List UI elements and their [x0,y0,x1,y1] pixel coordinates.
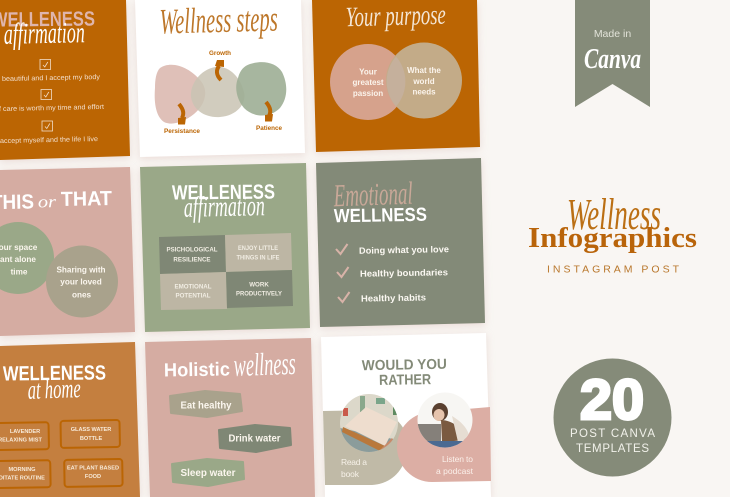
badge text: POST CANVA [570,428,655,440]
heading: this or that [0,187,113,214]
heading: holistic: Holistic [164,359,230,382]
script: at home: at home [27,373,81,405]
item text: FOOD [85,474,101,480]
list text: Healthy habits [361,292,426,304]
venn text: world [412,77,435,86]
grid of four quadrants: WORK [249,282,269,288]
item text [0,427,119,482]
grid of four quadrants: RESILIENCE [173,256,211,264]
option text: read a book: Read a [341,457,367,467]
grid of four quadrants: THINGS IN LIFE [236,254,280,262]
grid of four quadrants [159,233,293,310]
option text: Sharing with [56,266,106,274]
subtitle: instagram post: INSTAGRAM POST [547,264,680,276]
script: wellness: wellness [233,345,296,383]
shape: pink option [397,407,491,482]
heading: this or that: THAT [61,187,113,211]
venn text: passion [353,89,383,98]
badge: eat healthy [170,391,242,417]
item text: EAT PLANT BASED [67,466,119,472]
option text [0,243,106,300]
script: affirmation: affirmation [183,190,265,224]
photo: woman with headphones [417,392,475,449]
venn text: Your [359,68,377,76]
grid of four quadrants: PSICHOLOGICAL [166,246,218,254]
ribbon: made in canva [575,0,650,107]
shape: taupe option [323,410,408,485]
venn text [352,66,441,98]
arrow: patience [265,102,273,122]
script: affirmation: affirmation [3,16,85,51]
number: 20: 20 [580,368,644,432]
step labels: Growth [209,51,231,57]
item text: GLASS WATER [71,427,111,433]
option text: ant alone [0,255,36,264]
check icons [336,244,350,302]
option text: ones [72,290,91,300]
panel: this or that [0,167,135,336]
panel: welleness at home [0,342,140,497]
blob: beige [191,67,244,117]
heading: welleness: WELLENESS [172,181,275,204]
option text: time [11,268,28,276]
step labels: Patience [256,126,283,132]
badge: drink water [219,425,291,452]
grid of four quadrants: PRODUCTIVELY [236,290,283,298]
list text: Healthy boundaries [360,267,448,279]
ribbon text: made in: Made in [594,28,631,40]
heading: would you rather: WOULD YOU [362,357,447,374]
panel: wellness affirmation checklist [0,0,130,160]
panel: wellness steps [135,0,305,157]
item boxes [0,420,123,488]
arrow: growth [215,60,224,80]
title: infographics: Infographics [528,222,697,254]
option text: listen to a podcast [436,454,474,476]
option text: read a book [341,457,367,479]
badge: eat healthy: Eat healthy [180,400,232,412]
title: wellness infographics [528,190,697,276]
option text: listen to a podcast: Listen to [442,454,473,464]
panel: your purpose venn [312,0,480,152]
ribbon script: canva: Canva [584,43,641,75]
panel: holistic wellness [145,338,315,497]
list text: Doing what you love [359,244,449,256]
badge: drink water: Drink water [228,434,281,444]
step labels [164,51,283,135]
option text: your loved [60,278,102,286]
script: emotional: Emotional [332,175,413,213]
venn diagram [330,42,462,120]
checklist text: beautiful and I accept my body [2,74,101,83]
option text: listen to a podcast: a podcast [436,466,474,476]
circle: this [0,222,54,294]
blob: pink [155,65,205,124]
circle: that [46,246,118,318]
grid of four quadrants: POTENTIAL [175,292,211,300]
venn text: needs [412,88,436,96]
script title: wellness: Wellness [567,190,661,239]
step labels: Persistance [164,129,201,135]
list text [359,244,449,304]
heading: welleness: WELLENESS [3,361,106,386]
checklist text [0,74,104,145]
item text: MORNING [8,467,36,473]
blob: green [236,62,286,116]
checkboxes [40,60,52,131]
heading: this or that: or [38,192,57,211]
photo: open book [340,394,398,453]
arrow: persistance [178,104,186,124]
venn text: greatest [352,78,384,87]
option text: read a book: book [341,469,360,479]
panel: emotional wellness [316,158,485,327]
badge text [570,428,655,455]
grid of four quadrants: ENJOY LITTLE [238,245,278,252]
checklist text: f care is worth my time and effort [0,104,104,113]
grid of four quadrants: EMOTIONAL [174,284,212,290]
badge: 20 post canva templates [554,358,672,476]
badge: sleep water [172,459,244,486]
item text: LAVENDER [10,429,40,435]
panel: welleness affirmation grid [140,163,310,332]
badge: sleep water: Sleep water [180,468,236,479]
checklist text: accept myself and the life I live [0,136,98,145]
heading: wellness: WELLNESS [334,205,427,227]
item text: BOTTLE [80,436,102,442]
badge text: TEMPLATES [576,443,649,455]
panel: would you rather [321,333,491,497]
heading: would you rather [362,357,447,389]
venn text: What the [407,66,441,75]
heading: would you rather: RATHER [379,372,432,389]
